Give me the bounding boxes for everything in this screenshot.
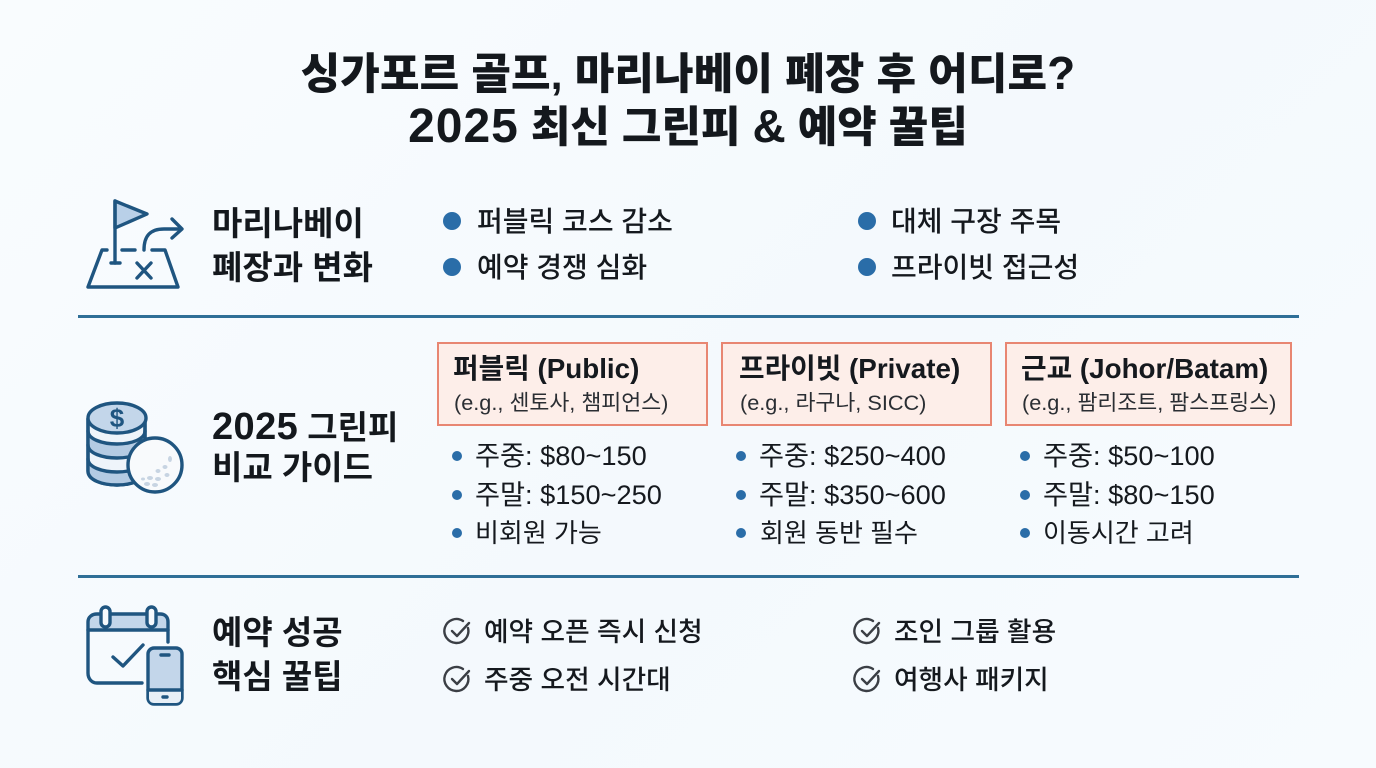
section: Marina Bay closure bbox=[86, 199, 373, 289]
card: public bbox=[437, 342, 708, 426]
check icon bbox=[853, 666, 880, 692]
heading: 핵심 꿀팁 bbox=[212, 658, 343, 695]
text: 주말: $150~250 bbox=[475, 479, 662, 510]
bullet bbox=[452, 451, 462, 461]
bullet bbox=[443, 212, 461, 230]
icon: calendar and phone bbox=[86, 605, 184, 706]
text: 비회원 가능 bbox=[475, 518, 602, 548]
name: 근교 (Johor/Batam) bbox=[1021, 353, 1268, 384]
text: 프라이빗 접근성 bbox=[891, 252, 1079, 283]
bullet bbox=[736, 528, 746, 538]
text: 여행사 패키지 bbox=[894, 665, 1049, 695]
card: nearby bbox=[1005, 342, 1292, 426]
check icon bbox=[443, 666, 470, 692]
name: 퍼블릭 (Public) bbox=[453, 353, 639, 384]
name: 프라이빗 (Private) bbox=[739, 353, 960, 384]
text: 조인 그룹 활용 bbox=[894, 617, 1056, 647]
tip list bbox=[443, 617, 1056, 695]
text: 예약 경쟁 심화 bbox=[477, 252, 647, 283]
text: 주중: $80~150 bbox=[475, 440, 647, 471]
heading bbox=[212, 406, 398, 486]
text: 이동시간 고려 bbox=[1043, 518, 1194, 548]
heading: 2025 그린피 bbox=[212, 406, 398, 448]
text: 대체 구장 주목 bbox=[891, 206, 1061, 237]
check icon bbox=[443, 618, 470, 644]
bullet bbox=[452, 528, 462, 538]
heading: 마리나베이 bbox=[212, 205, 364, 242]
heading: 비교 가이드 bbox=[212, 449, 373, 486]
examples: (e.g., 센토사, 챔피언스) bbox=[454, 390, 668, 415]
text: 주말: $80~150 bbox=[1043, 479, 1215, 510]
fee list: private bbox=[736, 440, 946, 548]
heading bbox=[212, 205, 373, 286]
bullet bbox=[736, 451, 746, 461]
bullet bbox=[858, 258, 876, 276]
text: 주중 오전 시간대 bbox=[484, 665, 671, 695]
heading: 예약 성공 bbox=[212, 614, 343, 651]
fee list: nearby bbox=[1020, 440, 1215, 548]
text: 주중: $250~400 bbox=[759, 440, 946, 471]
bullet bbox=[1020, 451, 1030, 461]
title bbox=[301, 47, 1075, 153]
bullet bbox=[858, 212, 876, 230]
text: 예약 오픈 즉시 신청 bbox=[484, 617, 703, 647]
icon: coins and golf ball: $ bbox=[110, 403, 125, 433]
text: 주중: $50~100 bbox=[1043, 440, 1215, 471]
text: 회원 동반 필수 bbox=[760, 518, 918, 548]
bullet bbox=[452, 490, 462, 500]
bullet bbox=[443, 258, 461, 276]
examples: (e.g., 라구나, SICC) bbox=[740, 390, 926, 415]
bullet bbox=[736, 490, 746, 500]
heading: 폐장과 변화 bbox=[212, 248, 373, 286]
examples: (e.g., 팜리조트, 팜스프링스) bbox=[1022, 390, 1276, 415]
bullet bbox=[1020, 528, 1030, 538]
card: private bbox=[721, 342, 992, 426]
bullet bbox=[1020, 490, 1030, 500]
icon: coins and golf ball bbox=[86, 401, 184, 494]
fee list: public bbox=[452, 440, 662, 548]
icon: flag on map bbox=[86, 199, 184, 289]
title: 2025 최신 그린피 & 예약 꿀팁 bbox=[408, 100, 968, 153]
bullet list: closure changes bbox=[443, 206, 1079, 283]
text: 주말: $350~600 bbox=[759, 479, 946, 510]
check icon bbox=[853, 618, 880, 644]
title: 싱가포르 골프, 마리나베이 폐장 후 어디로? bbox=[301, 47, 1075, 99]
heading bbox=[212, 614, 343, 695]
text: 퍼블릭 코스 감소 bbox=[477, 206, 673, 237]
